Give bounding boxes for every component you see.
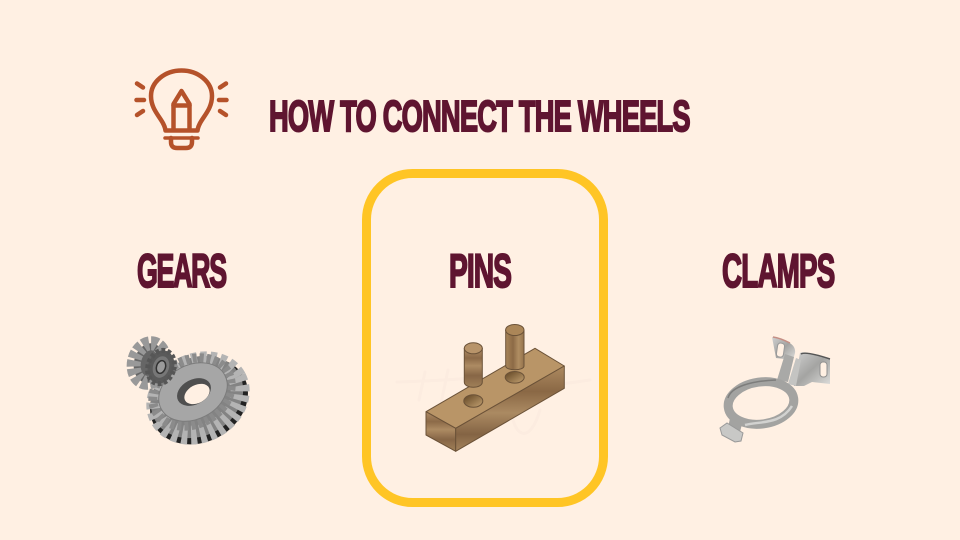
title: HOW TO CONNECT THE WHEELS — [269, 91, 691, 141]
block top — [426, 348, 564, 428]
icon: light bulb with pencil — [136, 71, 226, 148]
highlight frame: pins — [366, 174, 604, 502]
hole left — [464, 395, 483, 407]
icon: bevel gears — [130, 340, 263, 461]
heading: pins: PINS — [449, 246, 512, 298]
heading: gears: GEARS — [137, 245, 227, 298]
faint watermark — [397, 370, 590, 433]
heading: clamps: CLAMPS — [722, 246, 835, 298]
pin right — [506, 330, 524, 370]
block left face — [426, 412, 456, 451]
icon: wooden block with pins — [426, 324, 564, 451]
pin left — [464, 348, 482, 387]
hole right — [505, 372, 524, 383]
block right face — [456, 366, 564, 451]
icon: metal pipe clamp — [720, 337, 830, 442]
